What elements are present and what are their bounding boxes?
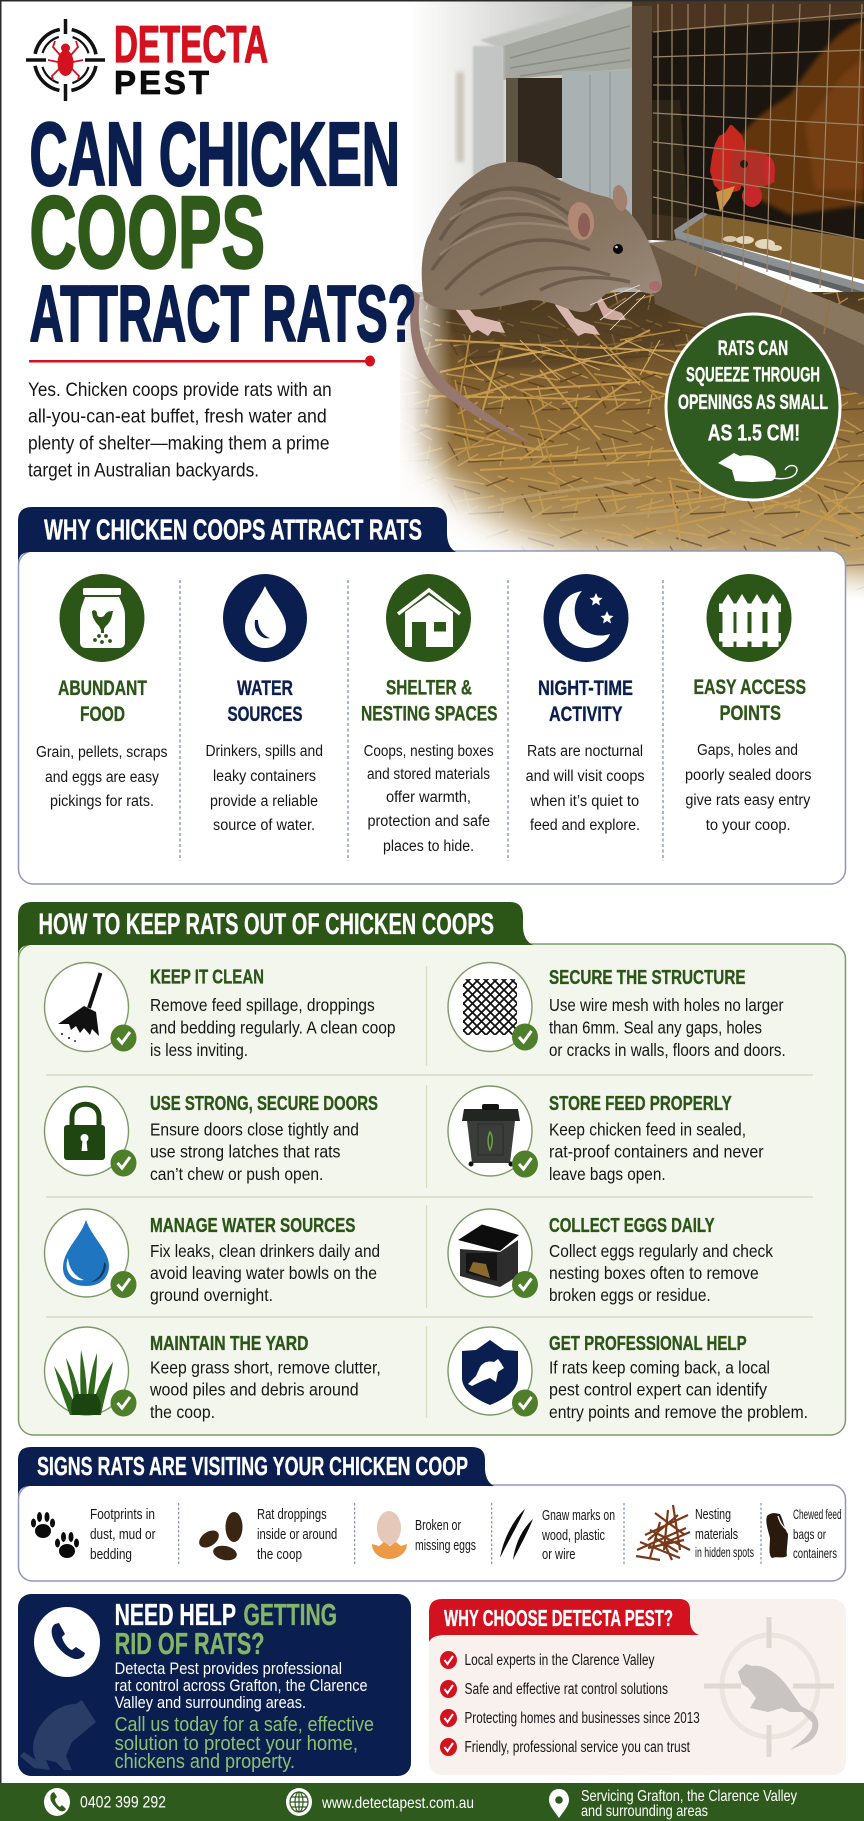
sign: chewed feed bags [766, 1507, 842, 1561]
item: secure the structure: or cracks in walls, floors and doors. [549, 1040, 786, 1060]
sign: footprints: dust, mud or [90, 1527, 156, 1543]
column: night-time activity: ACTIVITY [549, 702, 622, 726]
column: night-time activity: NIGHT-TIME [538, 676, 633, 700]
item: use strong, secure doors: use strong latches that rats [150, 1142, 341, 1162]
item: manage water sources: Fix leaks, clean drinkers daily and [150, 1241, 380, 1261]
list item [440, 1709, 700, 1727]
rat watermark [20, 1700, 96, 1770]
hen [710, 20, 864, 215]
heading: GETTING [244, 1597, 337, 1632]
sign: nesting materials: in hidden spots [695, 1545, 754, 1560]
icon: gnaw scratches [500, 1509, 533, 1560]
column: easy access points: Gaps, holes and [697, 742, 798, 759]
sign: broken eggs: missing eggs [415, 1538, 476, 1554]
title: CAN CHICKEN [30, 105, 400, 205]
logo: Detecta Pest [26, 16, 268, 101]
section: signs rats are visiting [18, 1447, 846, 1581]
sign: droppings: inside or around [257, 1527, 337, 1543]
column: water sources: WATER [237, 676, 293, 700]
icon: water drop [223, 574, 307, 662]
badge: check [512, 1024, 538, 1050]
sign: footprints: Footprints in [90, 1507, 155, 1523]
section heading tab [18, 507, 456, 565]
column: night-time activity: feed and explore. [530, 817, 640, 834]
list item: Local experts in the Clarence Valley [464, 1652, 655, 1669]
item: keep it clean: Remove feed spillage, droppings [150, 995, 375, 1015]
column: easy access points [685, 574, 812, 834]
sign: broken eggs [372, 1511, 476, 1559]
icon: phone [34, 1607, 100, 1677]
item: secure the structure: than 6mm. Seal any gaps, holes [549, 1018, 762, 1038]
column: night-time activity: when it’s quiet to [530, 793, 639, 810]
item: get professional help: pest control expert can identify [549, 1380, 767, 1400]
photo fade [390, 445, 864, 660]
heading: RID OF RATS? [115, 1626, 264, 1661]
item: manage water sources: avoid leaving water bowls on the [150, 1263, 377, 1283]
item: collect eggs daily: broken eggs or residue. [549, 1285, 711, 1305]
column: water sources: source of water. [213, 817, 315, 834]
item: store feed properly: Keep chicken feed in sealed, [549, 1120, 746, 1140]
body text [115, 1659, 367, 1712]
icon: chewed bag [766, 1513, 788, 1558]
badge: check [110, 1024, 136, 1052]
column: abundant food: pickings for rats. [50, 793, 154, 810]
column: shelter and nesting spaces: places to hide. [383, 838, 474, 855]
item: maintain the yard: the coop. [150, 1402, 215, 1422]
icon: twig nest [636, 1505, 690, 1560]
wooden beam [648, 240, 864, 396]
red divider with dot [29, 356, 375, 366]
icon: feed bag [60, 574, 144, 662]
column: abundant food: Grain, pellets, scraps [36, 744, 168, 761]
column: abundant food: ABUNDANT [58, 676, 147, 700]
icon: picket fence [706, 574, 792, 662]
icon: grass tuft [44, 1327, 128, 1415]
straw [420, 330, 864, 590]
logo wordmark: DETECTA [114, 16, 268, 74]
item: secure the structure: SECURE THE STRUCTURE [549, 966, 746, 989]
column: shelter and nesting spaces: Coops, nesting boxes [364, 743, 494, 760]
intro paragraph: target in Australian backyards. [28, 460, 259, 482]
sign: nesting materials: Nesting [695, 1507, 731, 1523]
item: get professional help: GET PROFESSIONAL HELP [549, 1332, 747, 1355]
intro paragraph: plenty of shelter—making them a prime [28, 432, 330, 454]
icon: paw prints [31, 1512, 79, 1558]
item: collect eggs daily: nesting boxes often to remove [549, 1263, 759, 1283]
feed tray [674, 212, 864, 298]
panel: why choose detecta pest [429, 1599, 846, 1775]
column: shelter and nesting spaces: SHELTER & [386, 676, 472, 700]
icon: nesting box [448, 1209, 532, 1297]
sign: gnaw marks: or wire [542, 1547, 576, 1563]
item: store feed properly [448, 1086, 764, 1184]
column: water sources: Drinkers, spills and [206, 743, 323, 760]
green call text: Call us today for a safe, effective [115, 1714, 374, 1736]
sign: nesting materials [636, 1505, 754, 1560]
item: use strong, secure doors: Ensure doors close tightly and [150, 1120, 359, 1140]
item: get professional help: If rats keep coming back, a local [549, 1358, 770, 1378]
column: shelter and nesting spaces: offer warmth, [386, 789, 471, 806]
section heading tab [18, 902, 533, 958]
item: maintain the yard: MAINTAIN THE YARD [150, 1332, 308, 1355]
panel [18, 551, 846, 884]
footer website [286, 1788, 474, 1816]
item: secure the structure: Use wire mesh with holes no larger [549, 995, 784, 1015]
column: shelter and nesting spaces: NESTING SPACES [361, 702, 498, 726]
body text: Valley and surrounding areas. [115, 1693, 306, 1712]
column: night-time activity: Rats are nocturnal [527, 743, 643, 760]
list item: Protecting homes and businesses since 2013 [464, 1710, 700, 1727]
column: water sources: SOURCES [228, 702, 302, 726]
item: use strong, secure doors [44, 1086, 378, 1184]
section: why chicken coops attract rats [18, 507, 846, 884]
item: use strong, secure doors: USE STRONG, SECURE DOORS [150, 1092, 378, 1115]
intro paragraph: Yes. Chicken coops provide rats with an [28, 379, 332, 401]
icon: wire mesh [448, 962, 532, 1052]
item: get professional help: entry points and remove the problem. [549, 1402, 808, 1422]
section heading tab: SIGNS RATS ARE VISITING YOUR CHICKEN COOP [37, 1451, 468, 1481]
sign: footprints: bedding [90, 1547, 132, 1563]
green call text: solution to protect your home, [115, 1733, 358, 1755]
section heading tab [429, 1599, 699, 1642]
item: maintain the yard: Keep grass short, remove clutter, [150, 1358, 381, 1378]
rat [422, 162, 662, 336]
wire mesh [653, 4, 864, 294]
badge: check [110, 1150, 136, 1176]
column: easy access points: give rats easy entry [685, 792, 811, 809]
sign: footprints [31, 1507, 156, 1563]
badge: check [110, 1390, 136, 1416]
list item [440, 1651, 655, 1669]
item: collect eggs daily: Collect eggs regularly and check [549, 1241, 773, 1261]
footer phone: 0402 399 292 [80, 1794, 166, 1812]
column: abundant food [36, 574, 168, 810]
item: keep it clean: KEEP IT CLEAN [150, 966, 264, 988]
column: shelter and nesting spaces: protection and safe [368, 813, 490, 830]
column: easy access points: EASY ACCESS [694, 675, 806, 699]
item: keep it clean: is less inviting. [150, 1040, 248, 1060]
item: store feed properly: STORE FEED PROPERLY [549, 1092, 732, 1115]
column: abundant food: and eggs are easy [45, 769, 159, 786]
column: water sources: leaky containers [213, 768, 316, 785]
item: store feed properly: leave bags open. [549, 1164, 666, 1184]
sign: droppings: Rat droppings [257, 1507, 327, 1523]
icon: white rat [718, 453, 797, 482]
column: water sources [206, 574, 323, 834]
sign: nesting materials: materials [695, 1527, 738, 1543]
sign: droppings [196, 1507, 337, 1563]
item: use strong, secure doors: can’t chew or push open. [150, 1164, 323, 1184]
column: easy access points: to your coop. [706, 817, 791, 834]
icon: moon and stars [544, 574, 628, 662]
section: how to keep rats out [18, 902, 846, 1435]
item: keep it clean [44, 962, 396, 1060]
item: collect eggs daily: COLLECT EGGS DAILY [549, 1214, 715, 1237]
sign: gnaw marks: wood, plastic [541, 1528, 605, 1544]
item: get professional help [448, 1327, 808, 1422]
icon: blue water drop [44, 1209, 128, 1297]
footer location: and surrounding areas [581, 1803, 708, 1820]
item: manage water sources: MANAGE WATER SOURCES [150, 1214, 355, 1237]
badge: check [512, 1150, 538, 1178]
title: COOPS [30, 176, 265, 290]
icon: house [386, 574, 471, 662]
item: manage water sources [44, 1209, 380, 1305]
logo wordmark: PEST [114, 64, 209, 101]
list item [440, 1738, 691, 1756]
section heading tab [18, 1447, 494, 1498]
panel [18, 1485, 846, 1581]
icon: droppings [196, 1512, 242, 1562]
panel: need help call to action [18, 1594, 411, 1776]
item: secure the structure [448, 962, 786, 1060]
footer website: www.detectapest.com.au [321, 1795, 474, 1812]
icon: feed bin [448, 1086, 532, 1176]
section heading tab: WHY CHICKEN COOPS ATTRACT RATS [44, 514, 422, 546]
item: store feed properly: rat-proof containers and never [549, 1142, 764, 1162]
badge: check [110, 1271, 136, 1298]
item: maintain the yard [44, 1327, 381, 1422]
footer phone [44, 1788, 166, 1816]
title: ATTRACT RATS? [30, 269, 416, 358]
body text: rat control across Grafton, the Clarence [115, 1676, 367, 1695]
column: night-time activity: and will visit coops [526, 768, 645, 785]
logo wordmark [114, 16, 268, 101]
section heading tab: HOW TO KEEP RATS OUT OF CHICKEN COOPS [38, 908, 494, 941]
crosshair rat watermark [704, 1617, 834, 1757]
sign: gnaw marks [500, 1508, 615, 1563]
ground [400, 292, 864, 632]
callout badge: squeeze through 1.5 cm [666, 314, 840, 500]
list item: Friendly, professional service you can trust [464, 1739, 691, 1756]
column: shelter and nesting spaces: and stored materials [367, 766, 490, 783]
icon: broom [44, 962, 128, 1052]
sign: chewed feed bags: bags or [793, 1526, 826, 1542]
column: night-time activity [526, 574, 645, 834]
column: easy access points: poorly sealed doors [685, 767, 812, 784]
callout badge: squeeze through 1.5 cm: RATS CAN [718, 337, 788, 360]
icon: padlock [44, 1086, 128, 1176]
intro paragraph [28, 379, 332, 482]
intro paragraph: all-you-can-eat buffet, fresh water and [28, 406, 327, 428]
column: abundant food: FOOD [80, 702, 125, 726]
item: manage water sources: ground overnight. [150, 1285, 273, 1305]
item: collect eggs daily [448, 1209, 773, 1305]
rat tail [410, 290, 532, 444]
title [30, 105, 416, 358]
heading [115, 1597, 337, 1661]
icon: shield with rat [448, 1327, 532, 1415]
body text: Detecta Pest provides professional [115, 1659, 342, 1678]
green call text: chickens and property. [115, 1751, 295, 1773]
item: maintain the yard: wood piles and debris around [149, 1380, 359, 1400]
list item [440, 1680, 668, 1698]
column: easy access points: POINTS [720, 701, 781, 725]
item: keep it clean: and bedding regularly. A clean coop [150, 1018, 396, 1038]
sign: chewed feed bags: containers [793, 1545, 837, 1561]
sign: broken eggs: Broken or [415, 1518, 461, 1534]
panel [18, 944, 846, 1435]
icon: crosshair with bug [26, 19, 105, 101]
sign: gnaw marks: Gnaw marks on [542, 1508, 615, 1524]
sign: droppings: the coop [257, 1547, 302, 1563]
footer location: Servicing Grafton, the Clarence Valley [581, 1788, 797, 1805]
section heading tab: WHY CHOOSE DETECTA PEST? [444, 1605, 673, 1631]
heading: NEED HELP [115, 1597, 236, 1632]
icon: cracked egg [372, 1511, 407, 1559]
footer bar [0, 1783, 864, 1821]
badge: check [512, 1271, 538, 1298]
green call text [115, 1714, 374, 1773]
badge: check [512, 1390, 538, 1416]
callout badge: squeeze through 1.5 cm: AS 1.5 CM! [708, 420, 800, 446]
column: water sources: provide a reliable [210, 793, 318, 810]
column: shelter and nesting spaces [361, 574, 498, 855]
hero photo: rat beside chicken coop [390, 0, 864, 660]
footer location [549, 1788, 797, 1820]
list item: Safe and effective rat control solutions [464, 1681, 668, 1698]
